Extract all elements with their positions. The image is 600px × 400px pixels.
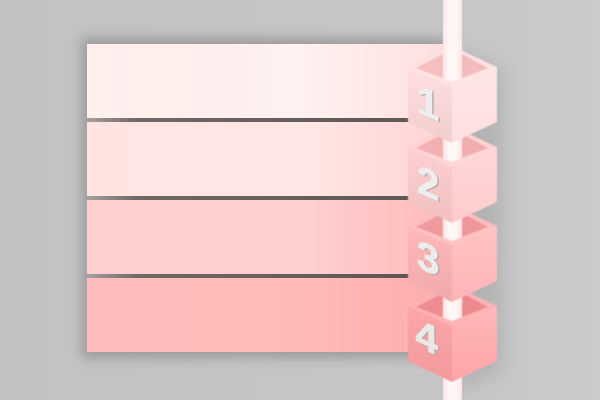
inner left wall [416, 293, 443, 319]
panels [87, 44, 445, 352]
inner left wall [416, 54, 443, 80]
front rim [408, 147, 497, 167]
inner left wall [416, 134, 443, 160]
digit 2: 2 [418, 157, 441, 211]
front rim [408, 226, 497, 246]
digit 1: 1 [418, 77, 441, 131]
digit 4: 4 [416, 310, 438, 364]
rim [408, 46, 497, 86]
rim [408, 285, 497, 325]
cube 4 [408, 285, 497, 382]
rod segment inside [443, 205, 462, 243]
front rim [408, 306, 497, 326]
inner right wall [462, 213, 488, 239]
cube 2 [408, 126, 497, 223]
rim [408, 126, 497, 166]
panel 3 [87, 200, 445, 274]
left face [408, 147, 452, 223]
right face [452, 306, 497, 382]
right face [452, 147, 497, 223]
panel shadow [82, 38, 447, 358]
left face [408, 67, 452, 143]
inner left wall [416, 213, 443, 239]
left face [408, 306, 452, 382]
cube 1 [408, 44, 497, 143]
digit 3: 3 [417, 231, 439, 285]
rod segment inside [443, 126, 462, 164]
digit 4: 4 [417, 311, 440, 365]
digit 2: 2 [417, 156, 439, 210]
inner right wall [462, 293, 488, 319]
panel 1 [87, 44, 445, 118]
right face [452, 226, 497, 302]
rod [443, 0, 462, 400]
rod segment inside [443, 285, 462, 323]
panel 4 [87, 278, 445, 352]
right face [452, 67, 497, 143]
cube column shadow [455, 50, 503, 392]
inner right wall [462, 54, 488, 80]
front rim [408, 67, 497, 87]
panel 2 [87, 122, 445, 196]
gap shadows [87, 118, 422, 278]
rod segment inside [443, 44, 462, 84]
inner right wall [462, 134, 488, 160]
digit 3: 3 [418, 232, 441, 286]
rim [408, 205, 497, 245]
left face [408, 226, 452, 302]
digit 1: 1 [417, 76, 439, 130]
cube 3 [408, 205, 497, 302]
